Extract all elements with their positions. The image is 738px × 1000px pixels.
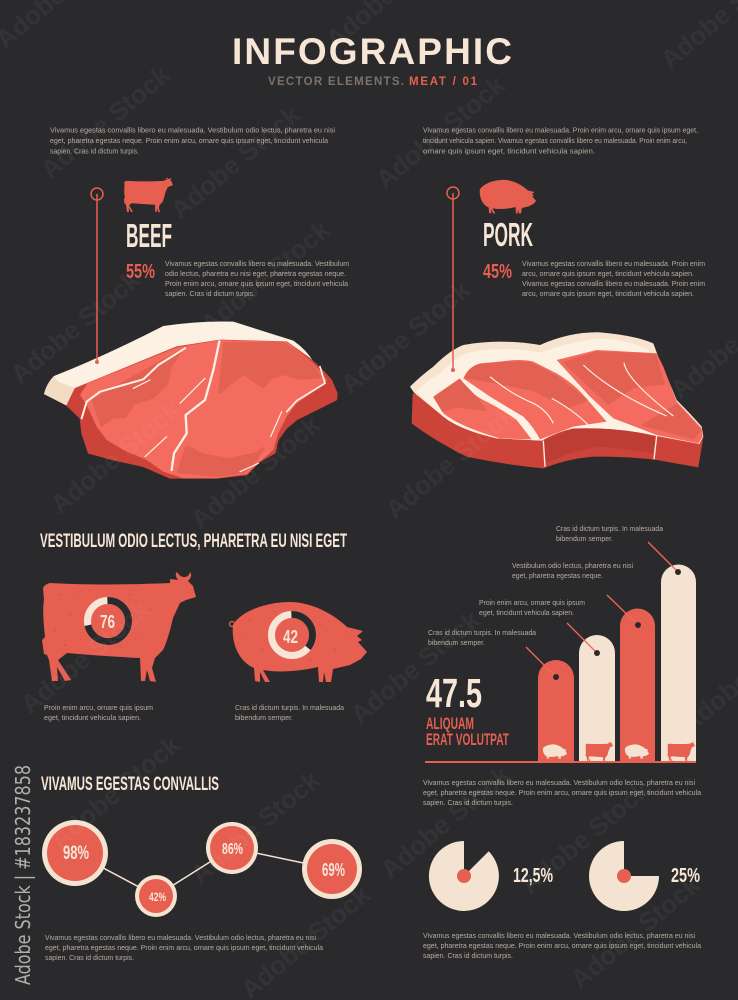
watermarks: Adobe Stock bbox=[380, 399, 521, 525]
bar caption 3: Vestibulum odio lectus, pharetra eu nisi bbox=[512, 563, 633, 570]
pie section bottom text: Vivamus egestas convallis libero eu malesuada. Vestibulum odio lectus, pharetra eu nisi bbox=[423, 933, 695, 940]
watermarks: Adobe Stock bbox=[375, 759, 516, 885]
watermarks: Adobe Stock bbox=[165, 99, 306, 225]
beef description bbox=[165, 261, 349, 298]
pie section bottom text: eget, pharetra egestas neque. Proin enim arcu, ornare quis ipsum eget, tincidunt vehicula bbox=[423, 943, 701, 950]
bar caption 3 bbox=[512, 563, 633, 580]
baseline bbox=[425, 761, 696, 763]
chart: pig donut bbox=[230, 602, 367, 682]
watermarks: Adobe Stock bbox=[335, 274, 476, 400]
intro text left bbox=[50, 128, 335, 156]
watermarks: Adobe Stock bbox=[195, 214, 336, 340]
title: INFOGRAPHIC bbox=[232, 31, 512, 72]
bar caption 1: Cras id dictum turpis. In malesuada bbox=[428, 630, 536, 637]
pork description bbox=[522, 261, 705, 298]
bar caption 1 bbox=[428, 630, 536, 647]
label 25%: 25% bbox=[671, 865, 700, 887]
section heading: vestibulum: VESTIBULUM ODIO LECTUS, PHARETRA EU NISI EGET bbox=[40, 530, 347, 552]
label 12,5%: 12,5% bbox=[513, 865, 553, 887]
beef steak illustration bbox=[44, 322, 337, 478]
watermarks: Adobe Stock bbox=[565, 869, 706, 995]
big number label: ERAT VOLUTPAT bbox=[426, 730, 509, 749]
bar caption 4 bbox=[556, 526, 663, 543]
pork description: arcu, ornare quis ipsum eget, tincidunt vehicula sapien. bbox=[522, 271, 694, 278]
bar caption 1: bibendum semper. bbox=[428, 640, 485, 647]
donut ring 42 bbox=[272, 614, 312, 656]
watermarks: Adobe Stock bbox=[15, 594, 156, 720]
bar 1 bbox=[538, 660, 574, 761]
heading: beef: BEEF bbox=[126, 217, 172, 254]
watermarks: Adobe Stock bbox=[185, 409, 326, 535]
intro text left: eget, pharetra egestas neque. Proin enim arcu, ornare quis ipsum eget, tincidunt vehicula bbox=[50, 138, 328, 145]
heading: pork: PORK bbox=[483, 216, 533, 253]
pie section top text: Vivamus egestas convallis libero eu malesuada. Vestibulum odio lectus, pharetra eu nisi bbox=[423, 780, 695, 787]
beef pin line bbox=[91, 188, 103, 364]
pointers bbox=[526, 542, 681, 680]
chart: bars bbox=[425, 542, 696, 763]
pork description: Vivamus egestas convallis libero eu malesuada. Proin enim bbox=[522, 281, 705, 288]
bar caption 4: Cras id dictum turpis. In malesuada bbox=[556, 526, 663, 533]
intro text left: Vivamus egestas convallis libero eu malesuada. Vestibulum odio lectus, pharetra eu nisi bbox=[50, 128, 335, 134]
bar caption 2: Proin enim arcu, ornare quis ipsum bbox=[479, 600, 585, 607]
watermarks: Adobe Stock bbox=[5, 264, 146, 390]
bar 1 icon bbox=[543, 744, 567, 759]
bar 2 icon bbox=[585, 742, 613, 761]
section heading: vivamus: VIVAMUS EGESTAS CONVALLIS bbox=[41, 773, 219, 795]
icon: cow bbox=[124, 177, 173, 212]
beef description: odio lectus, pharetra eu nisi eget, pharetra egestas neque. bbox=[165, 271, 346, 278]
pork description: arcu, ornare quis ipsum eget, tincidunt vehicula sapien. bbox=[522, 291, 694, 298]
subtitle: VECTOR ELEMENTS. bbox=[268, 76, 404, 88]
beef description: Vivamus egestas convallis libero eu malesuada. Vestibulum bbox=[165, 261, 349, 268]
bubble 86: 86% bbox=[222, 841, 243, 858]
bubble 69 bbox=[302, 839, 362, 899]
beef description: sapien. Cras id dictum turpis. bbox=[165, 291, 255, 298]
intro text right bbox=[423, 128, 698, 156]
pork pin line bbox=[447, 187, 459, 372]
chart: bubble line bbox=[42, 820, 362, 917]
donut ring 76 bbox=[88, 600, 128, 642]
intro text left: sapien. Cras id dictum turpis. bbox=[50, 148, 139, 156]
beef description: Proin enim arcu, ornare quis ipsum eget, tincidunt vehicula bbox=[165, 281, 348, 288]
bar 4 icon bbox=[667, 742, 695, 761]
bar caption 2 bbox=[479, 600, 585, 617]
connectors bbox=[75, 848, 332, 896]
bubble chart description bbox=[45, 935, 323, 962]
pie 12,5% bbox=[429, 841, 499, 911]
pie section top text: sapien. Cras id dictum turpis. bbox=[423, 800, 513, 807]
watermarks: Adobe Stock bbox=[370, 69, 511, 195]
bar caption 4: bibendum semper. bbox=[556, 536, 613, 543]
bubble chart description: sapien. Cras id dictum turpis. bbox=[45, 955, 134, 962]
bubble 98 bbox=[42, 820, 108, 886]
icon: pig bbox=[480, 180, 536, 213]
watermarks: Adobe Stock bbox=[45, 729, 186, 855]
bubble 42: 42% bbox=[149, 890, 166, 904]
pig caption: Cras id dictum turpis. In malesuada bbox=[235, 705, 344, 712]
cow silhouette bbox=[42, 572, 196, 682]
intro text right: ornare quis ipsum eget, tincidunt vehicula sapien. bbox=[423, 148, 595, 156]
pie section bottom text bbox=[423, 933, 701, 960]
watermarks: Adobe Stock bbox=[45, 394, 186, 520]
bar 3 bbox=[620, 608, 655, 761]
bubble 86 bbox=[206, 822, 258, 874]
chart: cow donut bbox=[42, 572, 196, 682]
subtitle: MEAT / 01 bbox=[409, 76, 478, 88]
intro text right: Vivamus egestas convallis libero eu malesuada. Proin enim arcu, ornare quis ipsum eget, bbox=[423, 128, 698, 134]
vertical stock credit: Adobe Stock | #183237858 bbox=[11, 765, 35, 985]
pork description: Vivamus egestas convallis libero eu malesuada. Proin enim bbox=[522, 261, 705, 268]
bar caption 2: eget, tincidunt vehicula sapien. bbox=[479, 610, 574, 617]
cow caption bbox=[44, 705, 153, 722]
panel: beef bbox=[44, 177, 349, 478]
bubble 42 bbox=[135, 875, 177, 917]
value 76: 76 bbox=[100, 612, 115, 632]
cow caption: Proin enim arcu, ornare quis ipsum bbox=[44, 705, 153, 712]
big number: 47.5 bbox=[426, 670, 482, 716]
pie section top text: eget, pharetra egestas neque. Proin enim arcu, ornare quis ipsum eget, tincidunt vehicula bbox=[423, 790, 701, 797]
bubble 69: 69% bbox=[322, 860, 345, 880]
bar caption 3: eget, pharetra egestas neque. bbox=[512, 573, 603, 580]
bubble chart description: eget, pharetra egestas neque. Proin enim arcu, ornare quis ipsum eget, tincidunt vehicula bbox=[45, 945, 323, 952]
cow caption: eget, tincidunt vehicula sapien. bbox=[44, 715, 141, 722]
watermarks: Adobe Stock bbox=[35, 59, 176, 185]
bar 3 icon bbox=[625, 744, 649, 759]
watermarks: Adobe Stock bbox=[515, 774, 656, 900]
watermarks: Adobe Stock bbox=[345, 604, 486, 730]
bubble 98: 98% bbox=[63, 843, 89, 864]
bar 4 bbox=[661, 565, 696, 761]
big number label: ALIQUAM bbox=[426, 714, 474, 733]
pig silhouette bbox=[230, 602, 367, 682]
pie section top text bbox=[423, 780, 701, 807]
beef percentage: 55% bbox=[126, 261, 155, 283]
subtitle bbox=[268, 76, 478, 88]
pig caption: bibendum semper. bbox=[235, 715, 293, 722]
panel: pork bbox=[410, 180, 705, 468]
pie 25% bbox=[589, 841, 659, 911]
intro text right: tincidunt vehicula sapien. Vivamus egestas convallis libero eu malesuada. Proin enim arcu, bbox=[423, 138, 687, 145]
value 42: 42 bbox=[283, 627, 298, 647]
watermarks: Adobe Stock bbox=[185, 764, 326, 890]
pork steak illustration bbox=[410, 332, 703, 468]
pork percentage: 45% bbox=[483, 261, 512, 283]
bar 2 bbox=[579, 635, 615, 761]
big number label bbox=[426, 714, 509, 749]
bubble chart description: Vivamus egestas convallis libero eu malesuada. Vestibulum odio lectus, pharetra eu nisi bbox=[45, 935, 316, 942]
pig caption bbox=[235, 705, 344, 722]
pie section bottom text: sapien. Cras id dictum turpis. bbox=[423, 953, 513, 960]
